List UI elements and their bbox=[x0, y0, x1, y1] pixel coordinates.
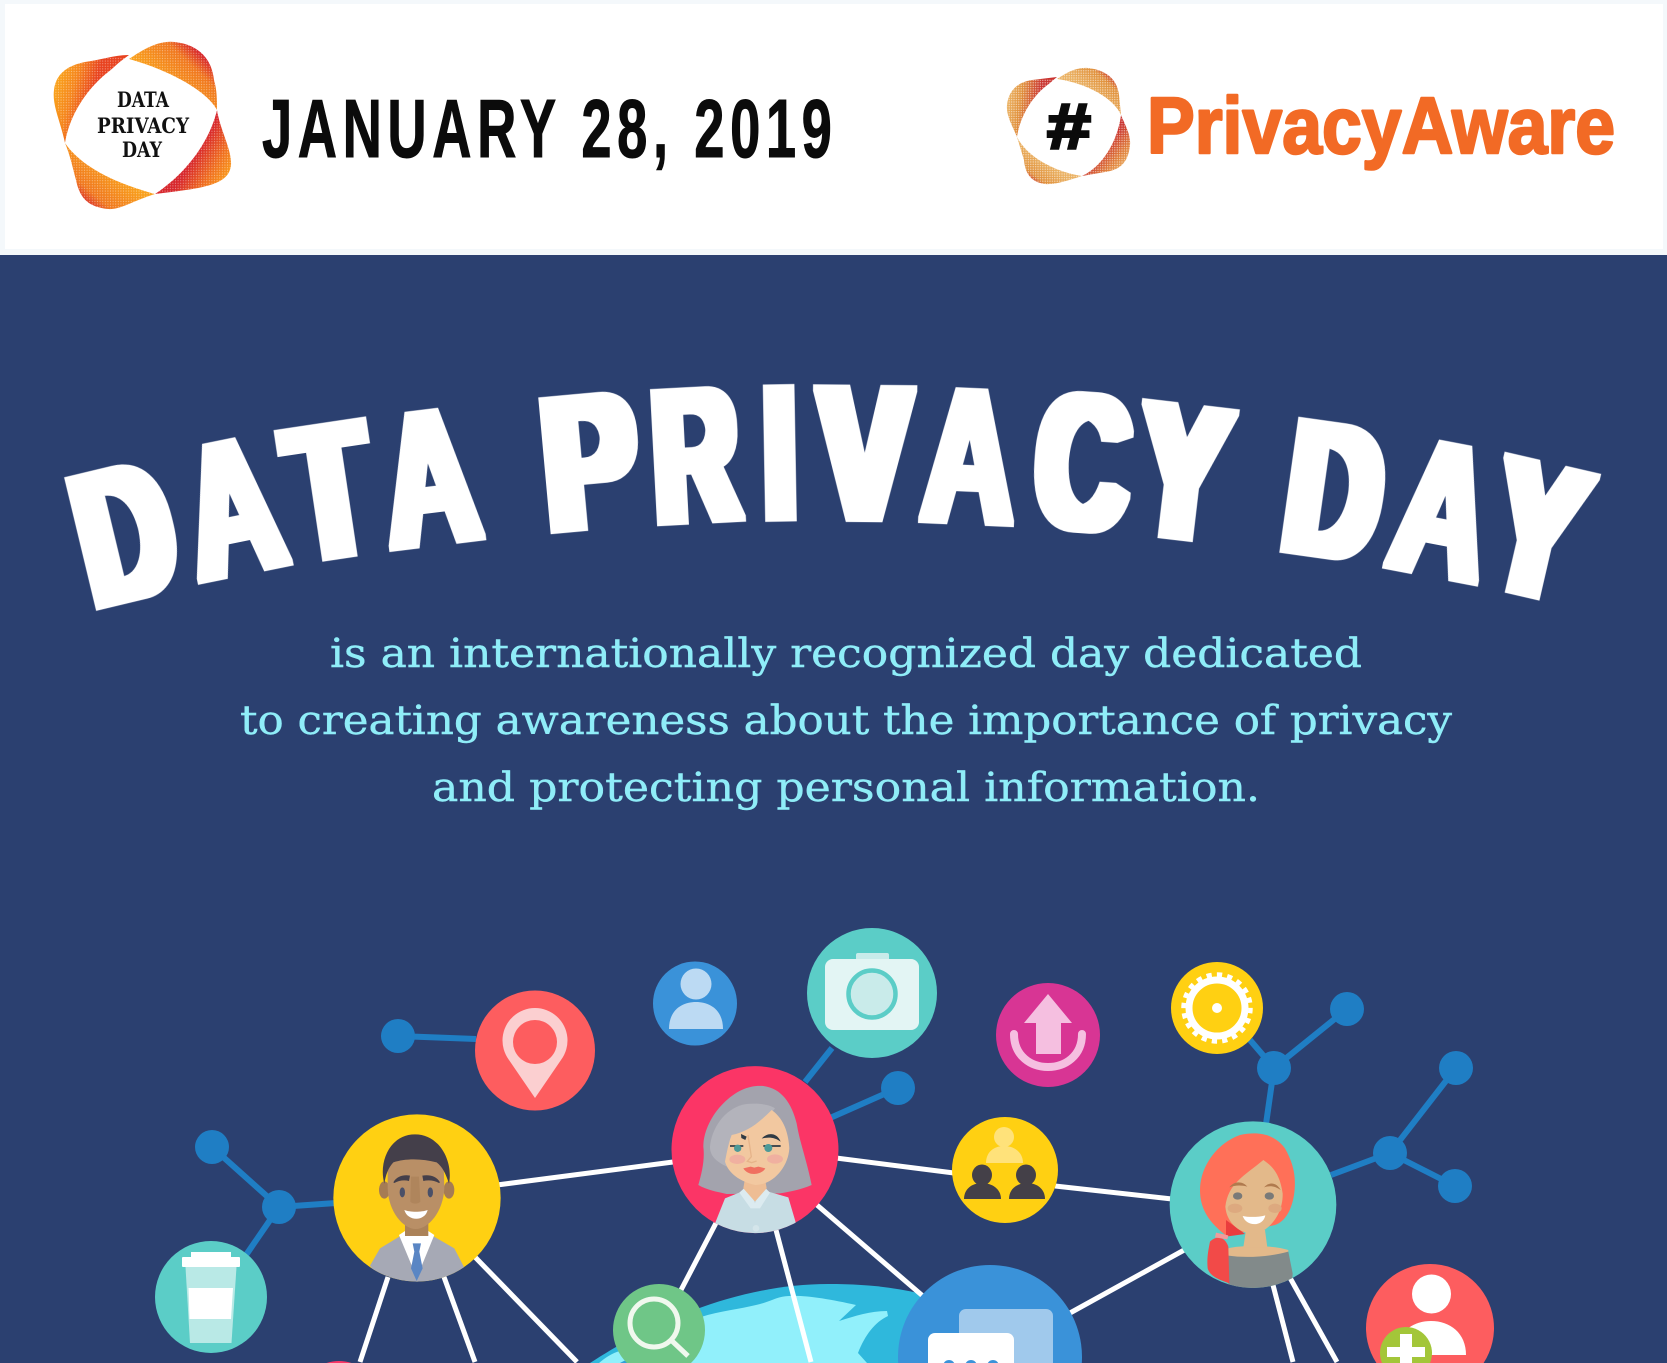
title: arched letters: T bbox=[275, 379, 385, 603]
icon: coffee cup bbox=[155, 1241, 267, 1353]
icon: profile bbox=[653, 962, 737, 1046]
title: arched letters: A bbox=[371, 367, 489, 590]
title: arched letters: D bbox=[1274, 380, 1395, 603]
subtitle text: and protecting personal information. bbox=[432, 765, 1260, 811]
logo: data privacy day ribbon: DATA bbox=[117, 87, 170, 112]
avatar: gray haired woman bbox=[671, 1066, 838, 1240]
icon: cropped pink circle bbox=[326, 1361, 352, 1363]
logo: data privacy day ribbon: PRIVACY bbox=[97, 113, 190, 138]
network: blue connector lines bbox=[212, 1009, 1456, 1255]
logo: data privacy day ribbon bbox=[54, 42, 231, 209]
logo: hashtag ribbon bbox=[1007, 68, 1130, 184]
network: white connector lines bbox=[360, 1158, 1337, 1362]
icon: group of people bbox=[952, 1117, 1058, 1223]
subtitle text: is an internationally recognized day dedicated bbox=[330, 631, 1362, 677]
icon: location pin bbox=[475, 990, 595, 1110]
title: arched letters: R bbox=[648, 347, 743, 564]
hashtag text: PrivacyAware bbox=[1147, 81, 1615, 170]
title: arched letters bbox=[55, 346, 1604, 648]
icon: magnifying glass bbox=[613, 1284, 705, 1363]
subtitle text: to creating awareness about the importance of privacy bbox=[240, 698, 1452, 744]
network: globe bbox=[590, 1284, 1000, 1363]
subtitle text bbox=[240, 631, 1452, 811]
icon: add user bbox=[1366, 1264, 1494, 1363]
title: arched letters: A bbox=[1377, 398, 1508, 624]
title: arched letters: I bbox=[762, 346, 798, 560]
icon: upload bbox=[996, 983, 1100, 1087]
icon: gear bbox=[1171, 962, 1263, 1054]
title: arched letters: D bbox=[55, 420, 195, 648]
network: blue node dots bbox=[195, 992, 1473, 1224]
title: arched letters: Y bbox=[1128, 360, 1238, 583]
logo: hashtag ribbon: # bbox=[1046, 94, 1092, 168]
date heading: JANUARY 28, 2019 bbox=[262, 81, 837, 175]
title: arched letters: C bbox=[1030, 353, 1136, 573]
title: arched letters: A bbox=[166, 395, 299, 622]
header band bbox=[0, 0, 1667, 255]
logo: data privacy day ribbon: DAY bbox=[122, 137, 163, 162]
title: arched letters: A bbox=[919, 348, 1019, 565]
title: arched letters: V bbox=[819, 346, 910, 560]
avatar: red haired woman bbox=[1170, 1121, 1336, 1290]
icon: camera bbox=[807, 928, 937, 1058]
icon: chat windows bbox=[898, 1265, 1082, 1363]
title: arched letters: P bbox=[535, 352, 645, 572]
title: arched letters: Y bbox=[1471, 415, 1604, 643]
avatar: man in suit bbox=[333, 1114, 501, 1283]
